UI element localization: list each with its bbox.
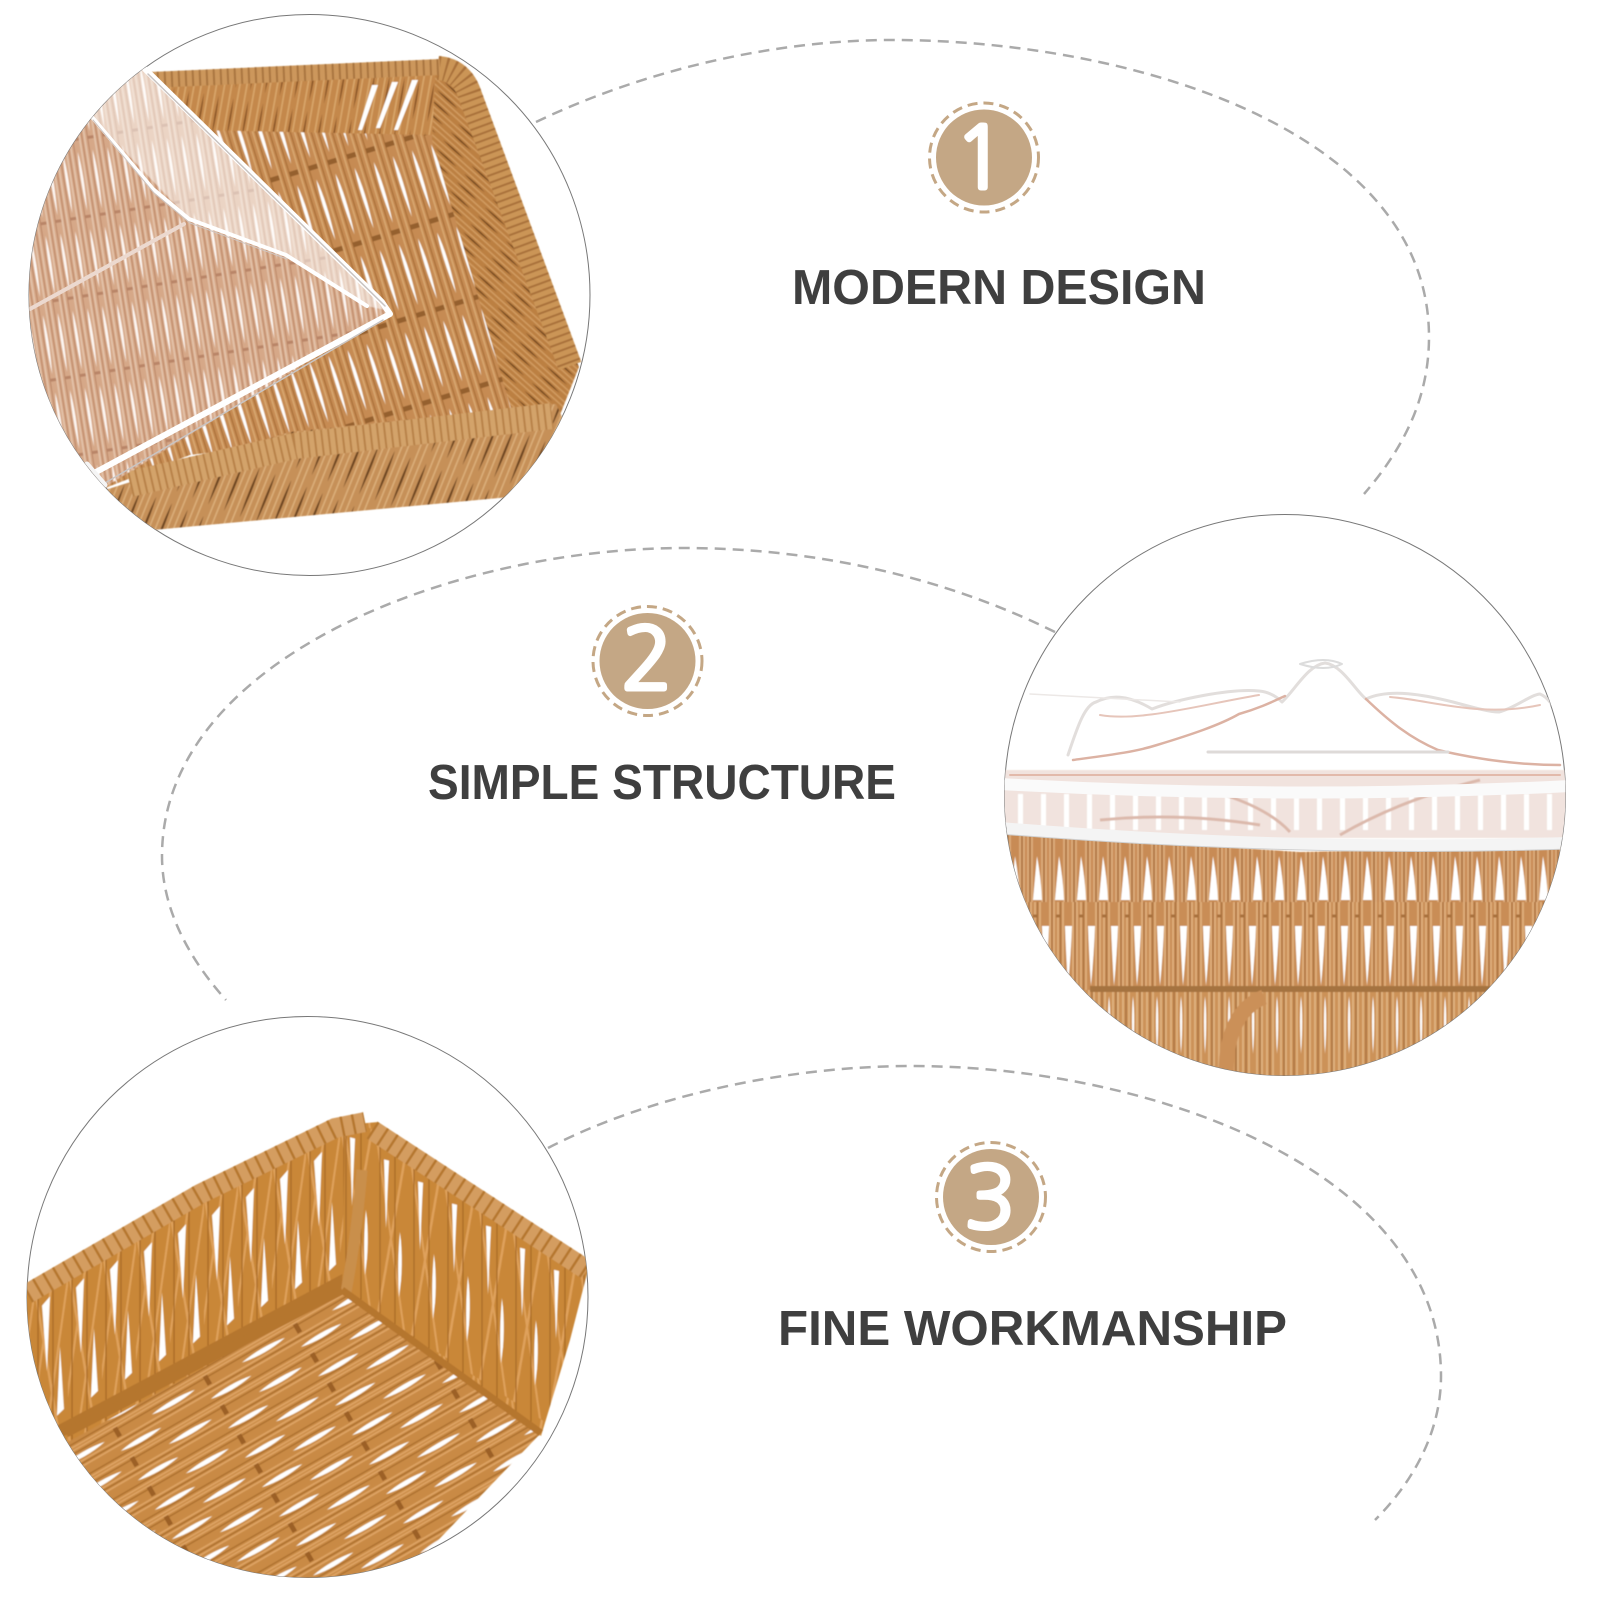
- heading: simple structure: SIMPLE STRUCTURE: [428, 756, 896, 810]
- lid contour lines: [1010, 660, 1560, 775]
- pale lid band: [1000, 770, 1570, 838]
- left wall of basket: [20, 1125, 345, 1443]
- number 2: 2: [621, 616, 673, 702]
- dashed connector curve 1: [536, 40, 1429, 494]
- back wall of basket: [167, 74, 436, 136]
- right rim of basket: [372, 1130, 587, 1270]
- floor of basket: [68, 1294, 539, 1578]
- wicker upper row: [1007, 832, 1561, 903]
- dashed connector curve 3: [548, 1066, 1441, 1520]
- photo circle: basket with lid corner: [0, 0, 590, 576]
- back rim of basket: [150, 67, 440, 80]
- left rim of basket: [27, 1122, 365, 1294]
- badge 2: [593, 606, 702, 716]
- lid flange: [92, 68, 384, 310]
- right rim of basket: [438, 68, 570, 366]
- right wall of basket: [342, 1122, 590, 1436]
- white lid rims: [1000, 784, 1570, 851]
- heading: fine workmanship: FINE WORKMANSHIP: [778, 1302, 1287, 1356]
- right wall of basket: [432, 62, 579, 425]
- number 3: 3: [964, 1155, 1016, 1241]
- wicker lower row: [1083, 989, 1485, 1076]
- clear lid edges: [30, 69, 390, 485]
- floor seam: [66, 1290, 342, 1433]
- badge 3: [936, 1142, 1046, 1252]
- front wall of basket: [105, 404, 566, 530]
- photo circle: lid side view over wicker: [1000, 514, 1570, 1080]
- pink reflections in lid band: [1100, 780, 1480, 835]
- badge 1: [930, 103, 1038, 212]
- photo circle: basket corner close-up: [0, 1016, 590, 1600]
- corner post: [346, 1170, 362, 1292]
- white slits in back wall corner: [358, 80, 418, 130]
- horizontal weave tie: [1090, 986, 1490, 992]
- dashed connector curve 2: [162, 548, 1055, 1000]
- wicker middle row: [1000, 902, 1570, 990]
- front rim of basket: [130, 416, 552, 484]
- basket floor: [105, 130, 511, 488]
- looping strand at base: [1226, 997, 1264, 1075]
- number 1: 1: [954, 115, 1006, 201]
- wicker seen through lid: [29, 68, 386, 487]
- heading: modern design: MODERN DESIGN: [792, 261, 1206, 315]
